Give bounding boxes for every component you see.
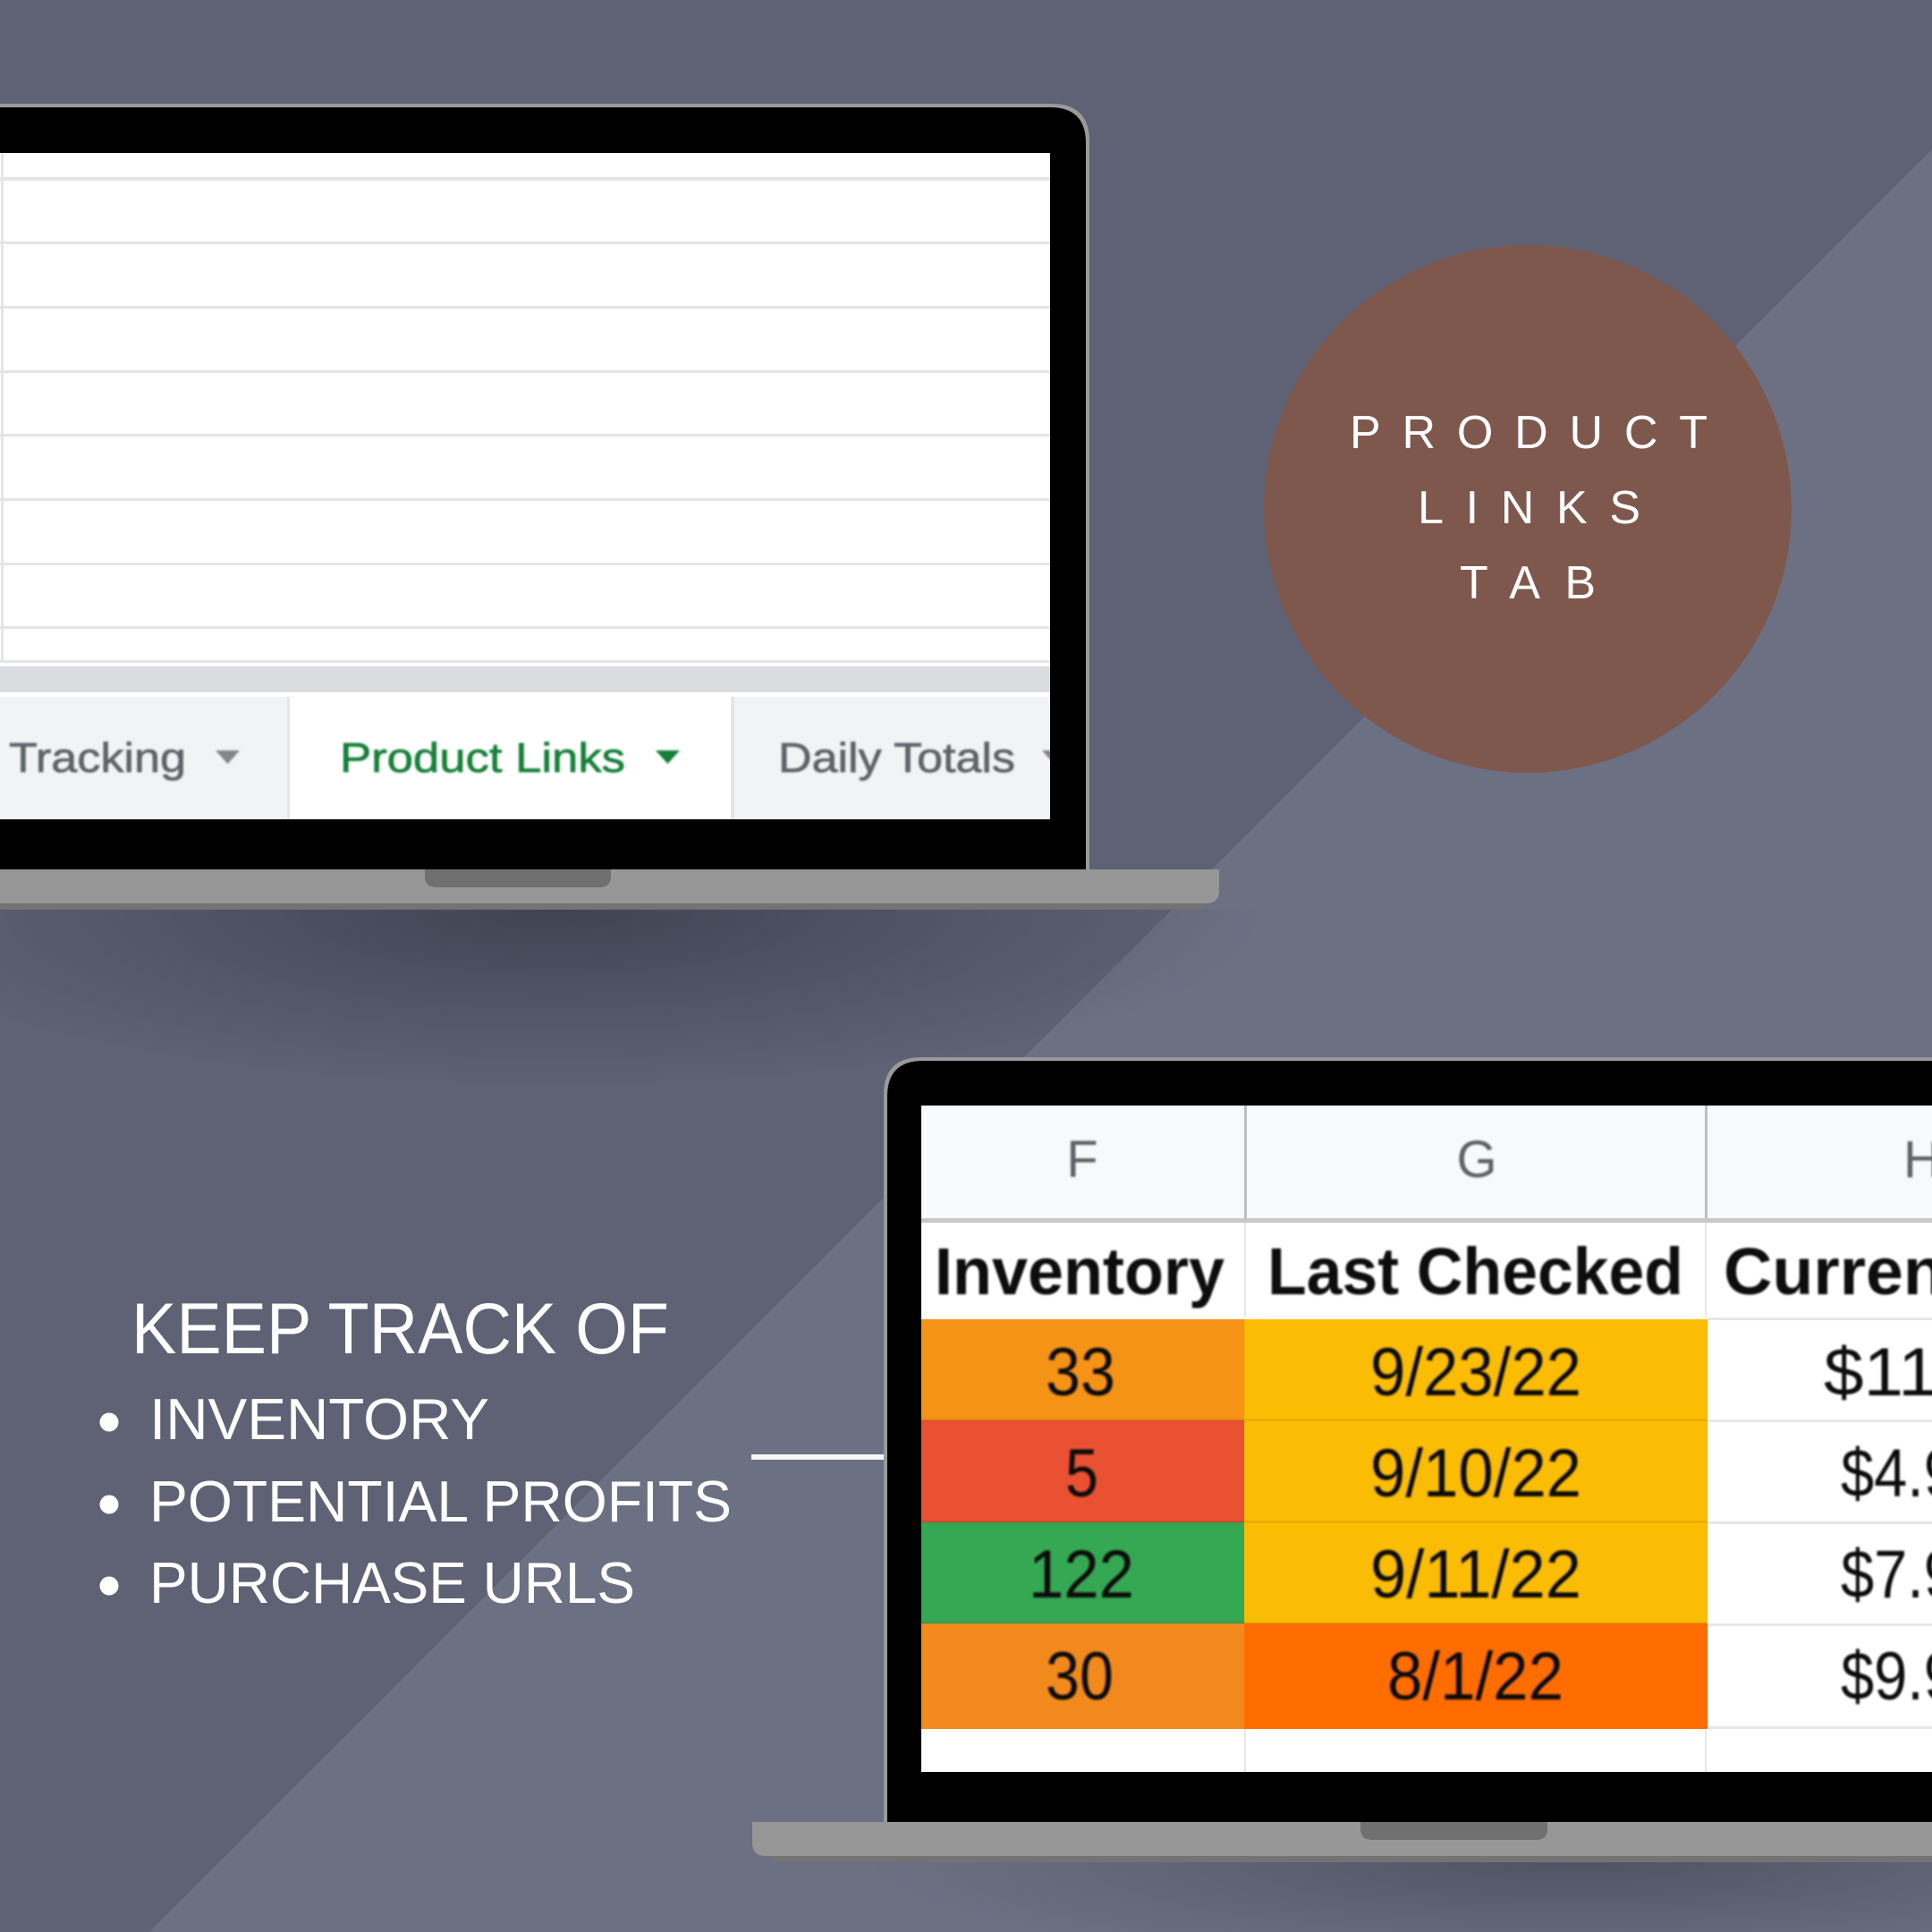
laptop: product links tab [0,104,1219,910]
tab: tracking: Tracking [9,734,186,781]
bullet: inventory: INVENTORY [149,1386,489,1452]
bullet: purchase urls: PURCHASE URLS [149,1550,635,1615]
header row: Inventory [935,1234,1224,1309]
data cells [921,1223,1932,1772]
current price column [1824,1335,1932,1715]
spreadsheet screen [921,1106,1932,1772]
tab: product links: Product Links [340,734,625,781]
laptop base [0,869,1219,910]
circle badge: product links tab [1264,245,1792,773]
laptop shadow: top [20,910,1089,1043]
last checked column: 9/23/22 [1370,1335,1581,1411]
laptop base [752,1822,1932,1862]
last checked column: 9/10/22 [1370,1436,1581,1512]
inventory column [1032,1345,1132,1701]
inventory column: 5 [1065,1436,1098,1512]
last checked column [1370,1335,1581,1715]
text block: keep track of [100,1289,732,1615]
laptop: inventory sheet [752,1057,1932,1862]
heading: KEEP TRACK OF [131,1289,669,1369]
table text [935,1234,1932,1715]
tab bar [0,697,1066,819]
circle badge: product links tab: TAB [1460,557,1596,609]
tab: tracking [9,734,240,781]
laptop frame [884,1057,1932,1825]
column headers: F [1066,1131,1098,1189]
laptop shadow: bottom [1055,1862,1932,1932]
laptop frame [0,104,1089,871]
last checked column: 9/11/22 [1370,1537,1581,1613]
last checked column: 8/1/22 [1387,1639,1563,1715]
circle badge: product links tab: PRODUCT [1350,407,1707,459]
bullet: potential profits: POTENTIAL PROFITS [149,1469,732,1534]
spreadsheet screen [0,153,1066,819]
tab: daily totals [780,741,1050,782]
inventory column: 122 [1029,1537,1134,1613]
circle badge: product links tab: LINKS [1418,482,1640,534]
header row: Last Checked [1267,1234,1683,1309]
column headers: G [1456,1131,1497,1189]
inventory column: 30 [1046,1639,1114,1715]
tab: product links [342,740,681,775]
tab: daily totals: Daily Totals [778,734,1015,781]
header row [937,1244,1932,1309]
column headers [921,1106,1932,1223]
connector line [751,1454,884,1460]
inventory column: 33 [1046,1335,1115,1411]
